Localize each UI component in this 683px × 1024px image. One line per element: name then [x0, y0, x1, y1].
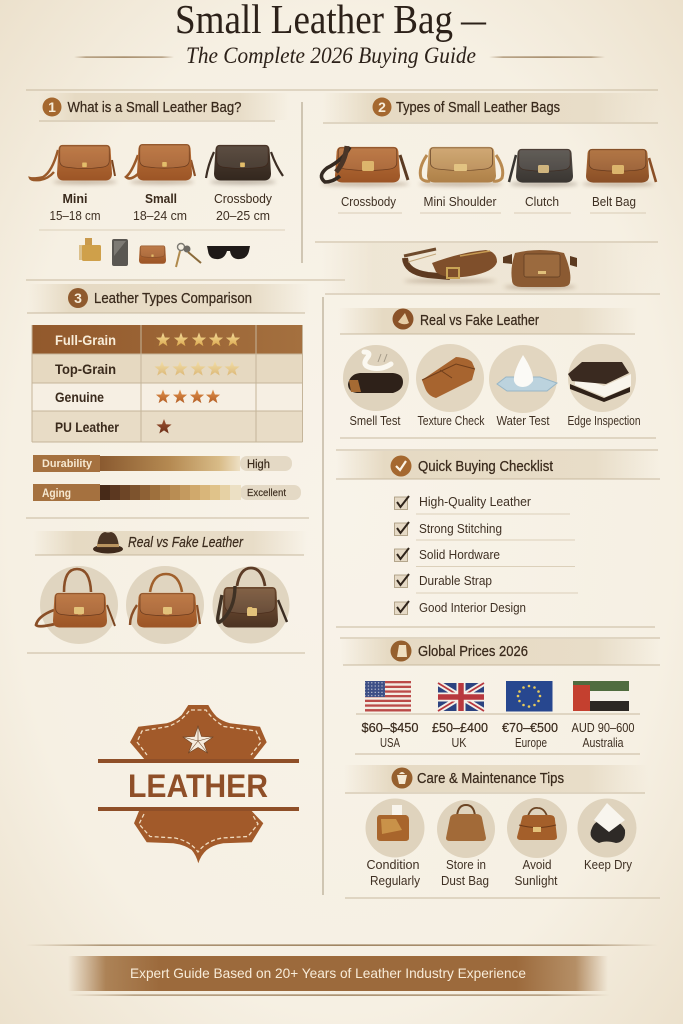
patch top [130, 705, 267, 760]
check item 4 [394, 574, 578, 593]
durability bar: High [247, 459, 270, 471]
row: top-grain [55, 361, 240, 377]
panel: global prices 2026 [340, 638, 660, 754]
price: europe: €70–€500 [502, 720, 558, 735]
heading: care tips [344, 765, 649, 793]
size label: crossbody: 20–25 cm [216, 209, 270, 223]
handbag circle 3 [212, 566, 290, 644]
size label: crossbody: Crossbody [214, 192, 273, 206]
icon: sunglasses [207, 246, 250, 259]
panel: quick buying checklist [336, 450, 660, 627]
heading: section 2: Types of Small Leather Bags [396, 100, 560, 116]
panel: what is a small leather bag [30, 93, 290, 267]
bag: clutch [509, 149, 578, 186]
check item 3: Solid Hordware [419, 548, 500, 562]
heading: global prices: Global Prices 2026 [418, 644, 528, 660]
size label: small: Small [145, 192, 177, 206]
size label: small [133, 192, 187, 223]
price: australia: Australia [582, 736, 624, 750]
heading: section 2 [322, 93, 662, 123]
row: genuine: Genuine [55, 389, 104, 405]
heading: real vs fake leather [338, 308, 638, 334]
type label: crossbody: Crossbody [341, 195, 397, 209]
type label: clutch [514, 195, 571, 213]
bag: mini [30, 145, 117, 184]
heading: real vs fake with hat [33, 531, 308, 555]
heading: global prices [340, 638, 660, 665]
heading: section 3 [27, 284, 310, 313]
tip: keep dry [578, 798, 636, 858]
row: full-grain [55, 332, 240, 348]
heading: section 3: Leather Types Comparison [94, 291, 252, 307]
panel: leather types comparison [27, 284, 310, 501]
test label: texture check: Texture Check [418, 414, 485, 428]
row: full-grain: Full-Grain [55, 332, 116, 348]
handbag circle 1 [36, 566, 118, 644]
size label: mini [50, 192, 100, 223]
heading: checklist: Quick Buying Checklist [418, 459, 553, 475]
bag: strap belt pouch [404, 249, 497, 283]
price: uk: UK [452, 736, 467, 750]
rules [98, 759, 299, 811]
type label: clutch: Clutch [525, 195, 559, 209]
bag: small [126, 144, 195, 184]
row: pu leather: PU Leather [55, 419, 119, 435]
aging bar: Excellent [247, 487, 286, 499]
subtitle with side rules: The Complete 2026 Buying Guide [186, 43, 476, 68]
price: usa [362, 720, 418, 750]
test label: water test: Water Test [496, 414, 550, 428]
bag: belt pouch front [503, 250, 577, 289]
bag: mini shoulder [419, 147, 503, 186]
wordmark: LEATHER [128, 768, 268, 804]
size label: mini: Mini [62, 192, 88, 206]
test: edge inspection [568, 344, 636, 412]
price: uk [432, 720, 488, 750]
size label: mini: 15–18 cm [50, 209, 100, 223]
row: genuine [55, 389, 220, 405]
icon: small wallet bag [139, 245, 166, 264]
test: smell [343, 345, 409, 411]
check item 3 [394, 548, 575, 566]
aging bar [33, 484, 301, 501]
test label: edge inspection: Edge Inspection [568, 414, 641, 428]
aging bar: Aging [42, 488, 71, 500]
check item 4: Durable Strap [419, 574, 492, 588]
tip label: condition regularly: Condition [366, 858, 420, 872]
icon: perfume [79, 238, 101, 261]
tip label: store in dust bag [441, 858, 489, 888]
tip label: avoid sunlight [514, 858, 558, 888]
durability bar [33, 455, 292, 472]
check item 1: High-Quality Leather [419, 495, 531, 509]
check item 1 [394, 495, 570, 514]
footer banner: Expert Guide Based on 20+ Years of Leather Industry Experience [130, 965, 526, 981]
price: australia [572, 720, 634, 750]
tip label: condition regularly: Regularly [370, 874, 421, 888]
comparison table [32, 325, 302, 442]
price: usa: USA [380, 736, 401, 750]
heading: section 1: 1 [48, 99, 56, 115]
panel: left real vs fake leather [33, 531, 308, 644]
heading: section 1: What is a Small Leather Bag? [68, 100, 242, 116]
price: australia: AUD 90–600 [572, 720, 634, 735]
test: texture [416, 344, 484, 412]
bag: belt bag [582, 149, 656, 186]
tip label: condition regularly [366, 858, 421, 888]
durability bar: Durability [42, 458, 93, 470]
check item 5: Good Interior Design [419, 601, 526, 615]
panel: real vs fake tests [338, 308, 656, 438]
price: europe: Europe [515, 736, 547, 750]
row: pu leather [55, 419, 172, 435]
tip label: avoid sunlight: Sunlight [514, 874, 558, 888]
bag: crossbody [321, 146, 409, 186]
flag: green white black with red [573, 681, 629, 711]
tip label: keep dry: Keep Dry [584, 858, 633, 872]
type label: belt bag: Belt Bag [592, 195, 636, 209]
size label: small: 18–24 cm [133, 209, 187, 223]
size label: crossbody [214, 192, 273, 223]
heading: real vs fake with hat: Real vs Fake Leather [128, 535, 244, 551]
patch bottom [134, 811, 263, 863]
heading: section 2: 2 [378, 99, 386, 115]
heading: real vs fake leather: Real vs Fake Leather [420, 313, 539, 329]
heading: care tips: Care & Maintenance Tips [417, 771, 564, 787]
tip: dust bag [437, 800, 495, 858]
bag: crossbody dark [206, 145, 283, 184]
tip label: store in dust bag: Store in [446, 858, 486, 872]
type label: mini shoulder: Mini Shoulder [424, 195, 496, 209]
tip label: store in dust bag: Dust Bag [441, 874, 489, 888]
leather badge logo [98, 705, 299, 863]
panel: care and maintenance tips [344, 765, 660, 898]
test: water [489, 345, 557, 413]
price: usa: $60–$450 [362, 720, 418, 735]
icon: phone [112, 239, 128, 266]
heading: section 3: 3 [74, 290, 82, 306]
flag: usa [365, 681, 411, 712]
heading: section 1 [38, 93, 290, 121]
tip label: avoid sunlight: Avoid [522, 858, 552, 872]
row: top-grain: Top-Grain [55, 361, 116, 377]
handbag circle 2 [126, 566, 204, 644]
check item 2 [394, 522, 575, 540]
price: uk: £50–£400 [432, 720, 488, 735]
check item 2: Strong Stitching [419, 522, 502, 536]
type label: belt bag [590, 195, 646, 213]
panel: types of small leather bags [315, 93, 662, 294]
price: europe [502, 720, 558, 750]
icon: keys [176, 244, 201, 267]
tip: avoid sunlight [507, 798, 567, 858]
test label: smell test: Smell Test [350, 414, 401, 428]
flag: uk [438, 683, 484, 711]
footer banner [26, 944, 658, 996]
flag: eu [506, 681, 552, 712]
heading: checklist [336, 450, 660, 479]
tip: condition [366, 798, 424, 858]
